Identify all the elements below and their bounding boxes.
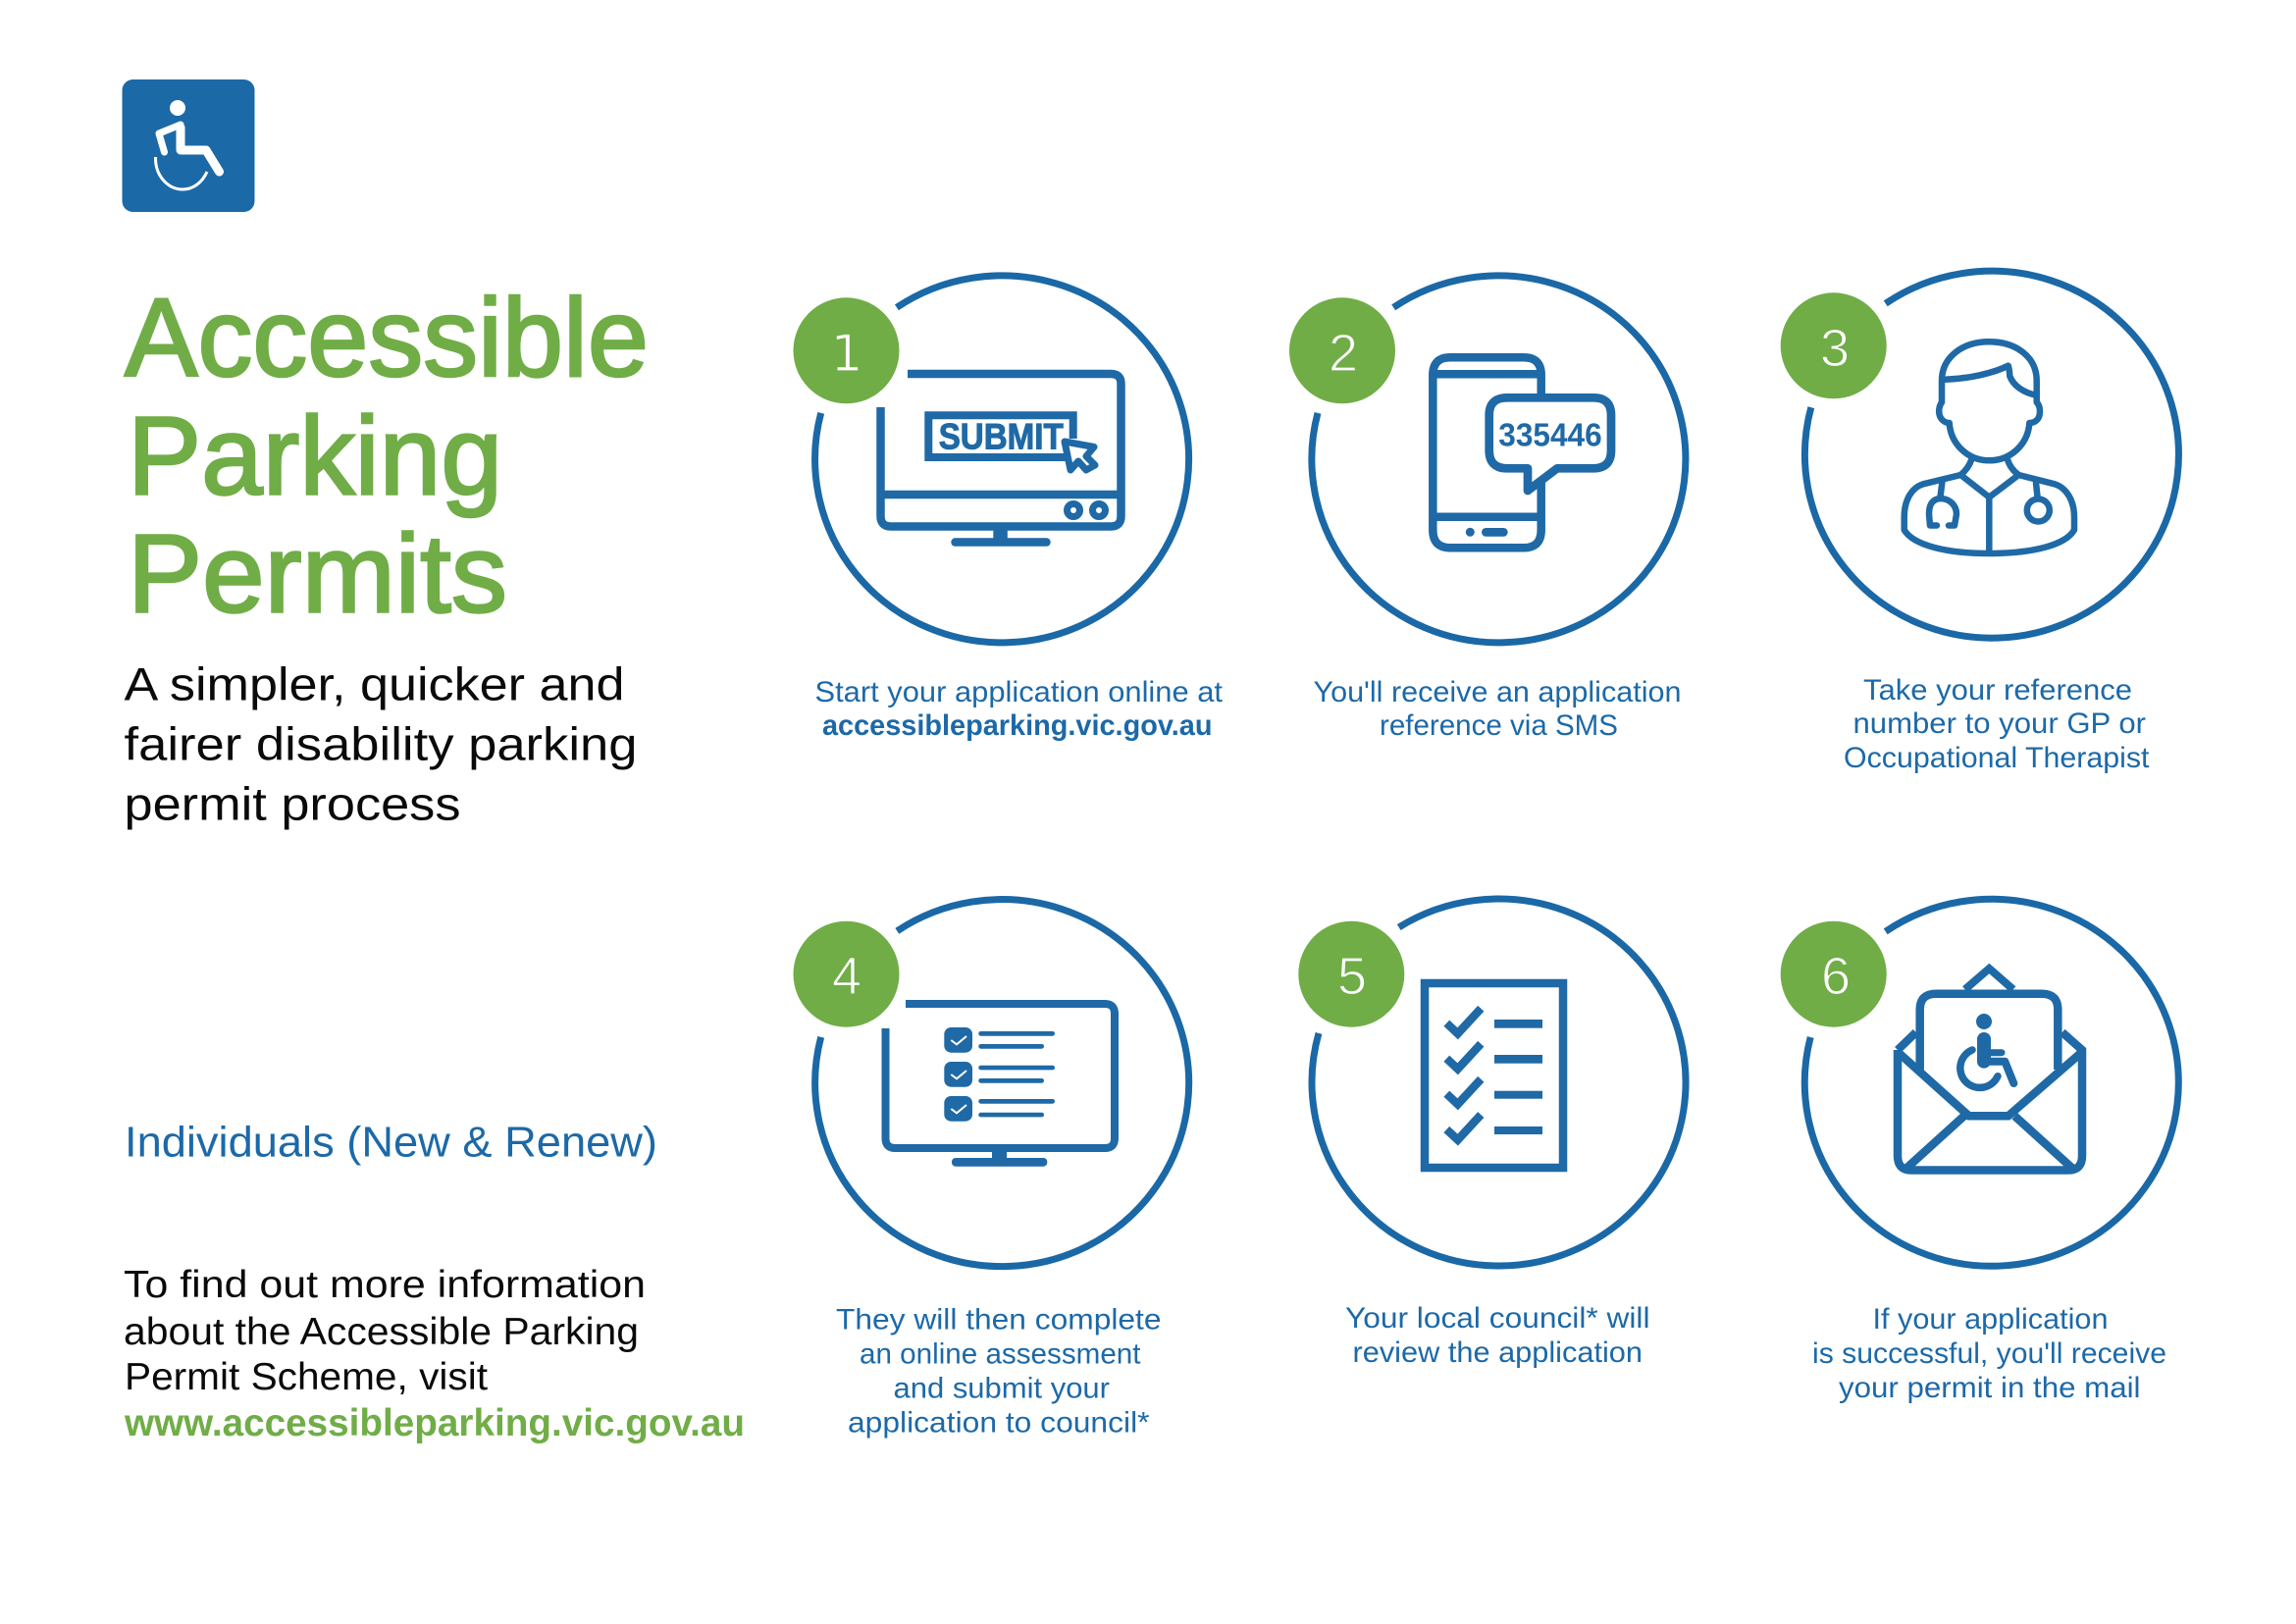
subtitle xyxy=(124,657,638,830)
icon: monitor with submit button xyxy=(881,374,1121,547)
caption: step 4: They will then complete xyxy=(836,1303,1162,1336)
more information text block: Permit Scheme, visit xyxy=(125,1356,488,1398)
logo: wheelchair symbol tile xyxy=(122,79,255,212)
subtitle: fairer disability parking xyxy=(124,718,638,769)
title: Accessible xyxy=(125,276,649,399)
caption: step 2 xyxy=(1313,676,1682,742)
badge: number 6: 6 xyxy=(1821,947,1851,1006)
panel: step 2 xyxy=(1289,276,1686,742)
badge: number 4 xyxy=(793,921,899,1027)
caption: step 2: reference via SMS xyxy=(1380,709,1618,742)
caption: step 6: If your application xyxy=(1872,1303,2108,1336)
icon: doctor with stethoscope xyxy=(1905,341,2074,553)
caption: step 6: your permit in the mail xyxy=(1839,1372,2141,1404)
badge: number 3: 3 xyxy=(1820,319,1850,378)
panel: step 3 xyxy=(1781,271,2178,774)
more information text block: about the Accessible Parking xyxy=(124,1311,639,1353)
badge: number 6 xyxy=(1781,921,1887,1027)
more information text block: www.accessibleparking.vic.gov.au xyxy=(124,1402,745,1444)
icon: phone with SMS bubble xyxy=(1433,357,1611,548)
panel: step 5 xyxy=(1298,899,1686,1369)
caption: step 3: Take your reference xyxy=(1863,674,2132,707)
icon: checklist document xyxy=(1425,983,1563,1168)
badge: number 5: 5 xyxy=(1337,947,1367,1006)
caption: step 6: is successful, you'll receive xyxy=(1812,1337,2166,1370)
panel: step 1 xyxy=(793,276,1224,742)
caption: step 3: number to your GP or xyxy=(1852,707,2146,740)
caption: step 4: and submit your xyxy=(893,1372,1110,1405)
caption: step 2: You'll receive an application xyxy=(1313,676,1682,708)
badge: number 1: 1 xyxy=(830,325,863,384)
badge: number 1 xyxy=(793,297,899,403)
more information text block: To find out more information xyxy=(124,1264,646,1306)
badge: number 2 xyxy=(1289,297,1395,403)
caption: step 5: Your local council* will xyxy=(1345,1302,1650,1335)
icon: open envelope with permit xyxy=(1898,969,2082,1170)
subtitle: A simpler, quicker and xyxy=(124,657,624,710)
badge: number 5 xyxy=(1298,921,1404,1027)
audience label: Individuals (New & Renew) xyxy=(125,1119,657,1166)
badge: number 2: 2 xyxy=(1329,324,1358,383)
icon: phone with SMS bubble: 335446 xyxy=(1498,417,1602,453)
badge: number 4: 4 xyxy=(832,947,861,1006)
caption: step 4: an online assessment xyxy=(860,1338,1141,1370)
caption: step 3 xyxy=(1844,674,2150,774)
panel: step 6 xyxy=(1781,899,2178,1404)
title: Permits xyxy=(128,512,507,636)
caption: step 3: Occupational Therapist xyxy=(1844,742,2150,774)
icon: monitor with submit button: SUBMIT xyxy=(939,416,1064,456)
caption: step 6 xyxy=(1812,1303,2166,1404)
caption: step 4 xyxy=(836,1303,1162,1439)
caption: step 1: accessibleparking.vic.gov.au xyxy=(822,709,1213,742)
subtitle: permit process xyxy=(124,777,461,830)
panel: step 4 xyxy=(793,900,1189,1439)
caption: step 5 xyxy=(1345,1302,1650,1369)
caption: step 1: Start your application online at xyxy=(814,676,1224,708)
caption: step 4: application to council* xyxy=(848,1407,1150,1439)
title: Parking xyxy=(128,394,502,518)
caption: step 5: review the application xyxy=(1352,1336,1643,1369)
caption: step 1 xyxy=(814,676,1224,742)
icon: monitor with checklist xyxy=(885,1004,1115,1167)
badge: number 3 xyxy=(1781,292,1887,398)
more information text block xyxy=(124,1264,745,1444)
title xyxy=(125,276,649,636)
